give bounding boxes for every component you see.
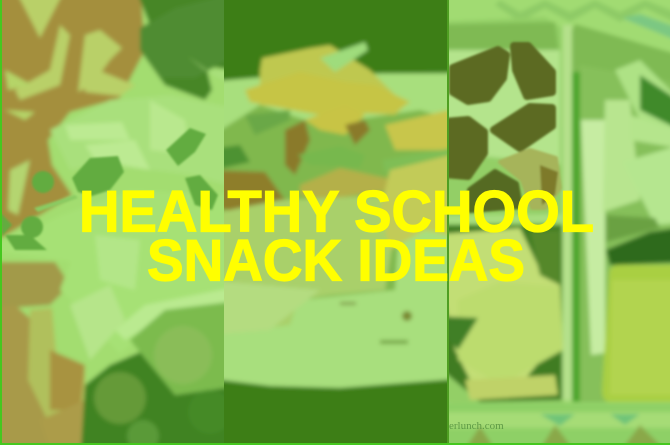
strawberries [445,46,560,210]
cup of dip [602,265,670,402]
title line 2: SNACK IDEAS [147,228,525,294]
watermark: erlunch.com [449,420,504,432]
cabbage highlights [48,96,224,182]
panel: salad photo [0,0,245,445]
panel: lunchbox photo [430,0,670,445]
cucumber sticks [581,120,605,355]
fish fillet [224,195,393,326]
plate [224,70,447,392]
asparagus spears [298,150,360,164]
chevron background bottom [449,402,670,443]
asparagus and yellow pepper pile [224,103,436,299]
tomato slices top left [0,0,145,250]
tomato lower left [0,262,70,310]
tray divider [430,214,562,224]
chevron background top [497,0,670,22]
dark olive leaf top right [138,0,224,102]
mint leaves [0,128,218,250]
bright edge between photos [447,0,449,445]
lower left compartment crackers background [449,222,564,404]
red pepper [285,120,310,175]
shredded cabbage centre [58,276,72,294]
title line 1: HEALTHY SCHOOL [79,180,594,244]
tray left compartment [449,18,562,402]
dark leaves & olives bottom [79,350,224,443]
panel: plate photo [224,0,447,443]
right compartment [571,24,670,402]
